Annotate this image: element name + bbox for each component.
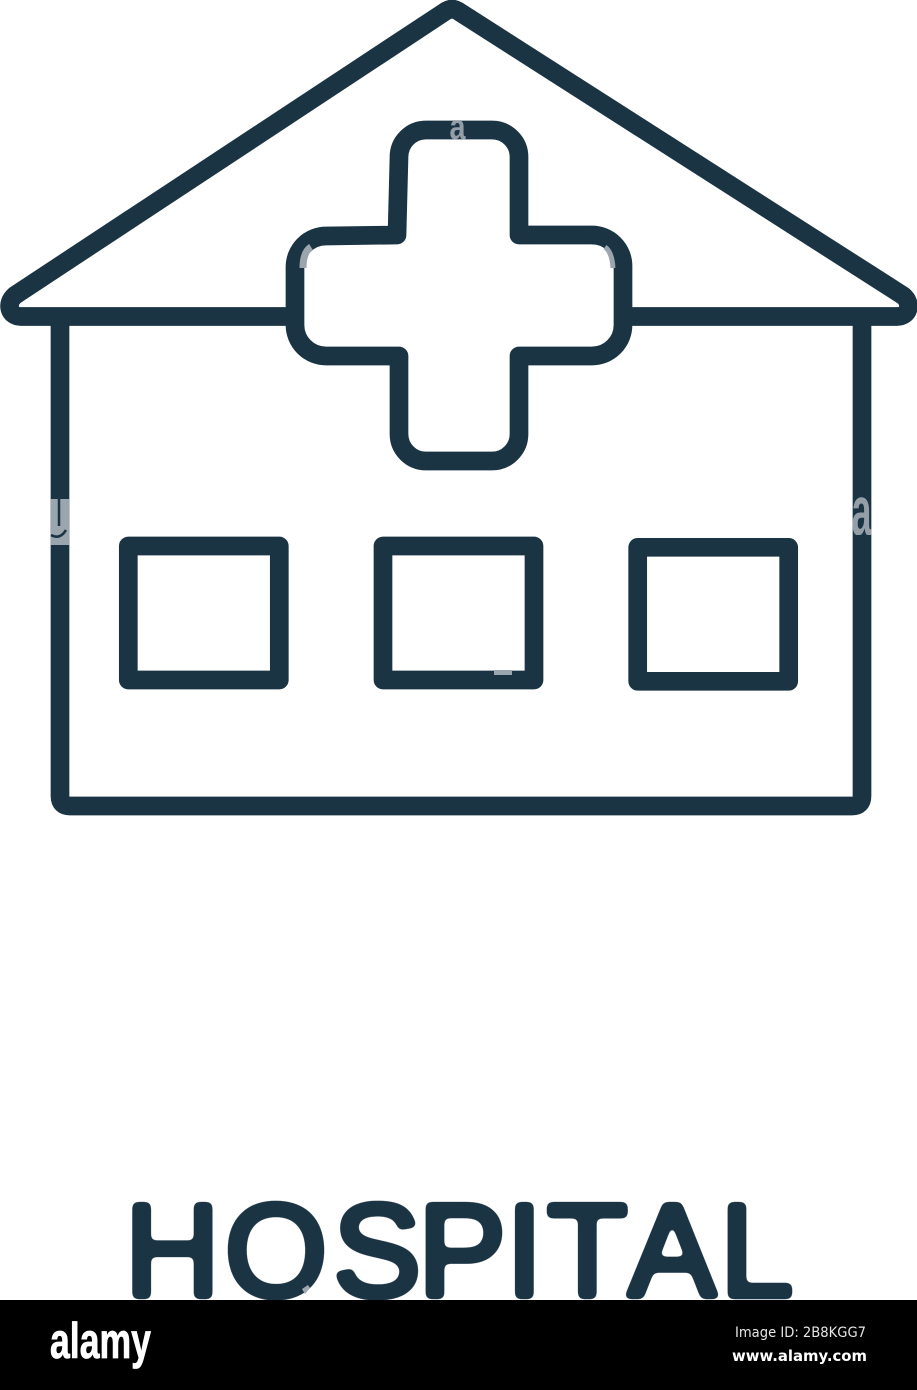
image id: Image ID: 2B8KGG7 xyxy=(735,1325,866,1341)
icon: left window xyxy=(128,546,279,680)
watermark fragments: a xyxy=(852,472,872,550)
watermark fragments xyxy=(51,106,872,675)
logo: alamy: alamy xyxy=(50,1313,151,1369)
watermark fragments: a xyxy=(450,106,466,147)
watermark fragment on title xyxy=(302,1285,310,1294)
website url: www.alamy.com xyxy=(732,1347,867,1365)
icon: middle window xyxy=(383,546,534,680)
footer bar xyxy=(0,1300,917,1390)
icon: right window xyxy=(638,547,789,681)
icon: roof xyxy=(10,9,908,317)
title: HOSPITAL: HOSPITAL xyxy=(125,1177,793,1324)
icon: hospital building xyxy=(10,9,908,806)
icon: medical cross xyxy=(295,130,623,461)
icon: building walls xyxy=(60,322,862,806)
